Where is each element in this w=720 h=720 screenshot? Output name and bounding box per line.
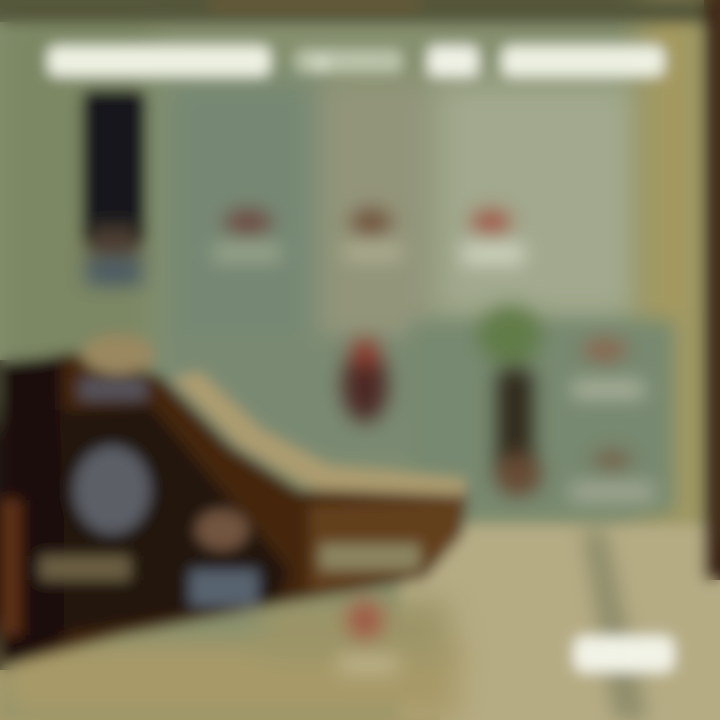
logo: Logo bbox=[582, 640, 666, 670]
sofa labels bbox=[40, 378, 420, 606]
title: Title text bbox=[52, 49, 662, 76]
callout: right column top bbox=[572, 338, 644, 398]
plant bbox=[478, 305, 542, 497]
panel: lower green wall bbox=[170, 320, 675, 515]
sofa top edge highlight bbox=[82, 334, 465, 496]
icon: red marker 2 bbox=[345, 208, 401, 259]
icon: red marker on floor bbox=[338, 600, 398, 673]
panel: dark vertical sign bbox=[82, 90, 146, 286]
icon: red marker 3 bbox=[462, 209, 524, 264]
sofa: brown furniture bbox=[0, 352, 468, 668]
icon: red marker 1 bbox=[214, 209, 280, 260]
callout: right column bottom bbox=[570, 450, 654, 501]
right edge: brown door frame bbox=[704, 0, 720, 580]
floor bbox=[0, 525, 720, 720]
icon: red figure centre bbox=[341, 338, 389, 423]
